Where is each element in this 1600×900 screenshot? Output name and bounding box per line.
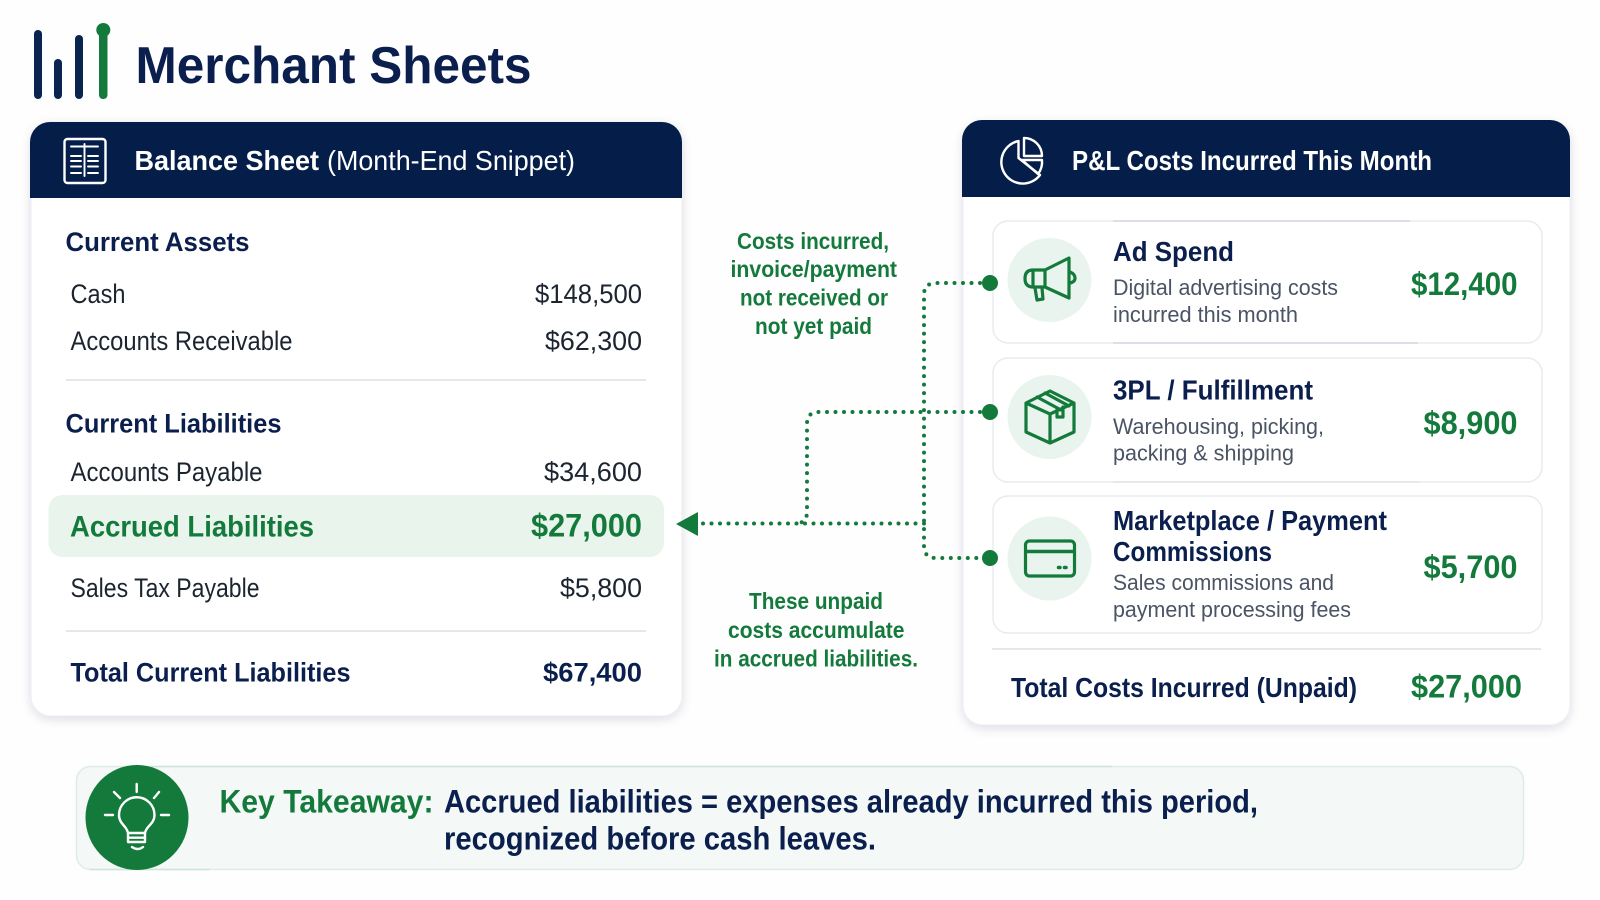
description: ad spend: Digital advertising costs (1113, 275, 1338, 300)
row: sales tax payable: Sales Tax Payable (70, 573, 260, 603)
annotation: unpaid costs accumulate: in accrued liabilities. (714, 646, 918, 672)
description: fulfillment: packing & shipping (1113, 440, 1294, 466)
label: fulfillment: 3PL / Fulfillment (1113, 374, 1313, 406)
cost card: ad spend (993, 221, 1542, 343)
connector node: ad spend (982, 275, 998, 291)
cost card: marketplace commissions (993, 496, 1542, 633)
amount: marketplace commissions: $5,700 (1424, 549, 1518, 585)
description: fulfillment: Warehousing, picking, (1113, 414, 1324, 439)
connector node: fulfillment (982, 404, 998, 420)
row: accounts payable: $34,600 (544, 457, 642, 487)
amount: ad spend: $12,400 (1411, 266, 1518, 302)
label: marketplace commissions: Marketplace / Payment (1113, 505, 1387, 536)
icon: megaphone (1025, 258, 1075, 300)
balance sheet heading: (Month-End Snippet) (327, 145, 575, 176)
annotation: costs incurred: not yet paid (755, 313, 872, 339)
takeaway text: Accrued liabilities = expenses already incurred this period, (444, 784, 1258, 820)
row: total current liabilities: Total Current Liabilities (70, 658, 350, 688)
section heading: current assets: Current Assets (66, 227, 250, 257)
annotation: unpaid costs accumulate: These unpaid (749, 588, 883, 614)
icon: pie chart (1001, 138, 1042, 184)
row: cash: Cash (70, 279, 126, 309)
label: marketplace commissions: Commissions (1113, 536, 1272, 567)
label: ad spend: Ad Spend (1113, 236, 1234, 267)
icon: box (1026, 391, 1074, 443)
annotation: costs incurred: Costs incurred, (737, 228, 889, 254)
row: total current liabilities (70, 658, 642, 688)
row: accounts receivable: Accounts Receivable (70, 326, 292, 356)
annotation: unpaid costs accumulate (714, 588, 918, 672)
row: accounts receivable: $62,300 (545, 326, 642, 356)
label: marketplace commissions (1113, 505, 1387, 567)
takeaway label: Key Takeaway: (220, 784, 434, 820)
P&L header bar (962, 120, 1570, 197)
balance sheet header bar (30, 122, 682, 198)
connector node: commissions (982, 550, 998, 566)
row: sales tax payable: $5,800 (560, 573, 642, 603)
total costs row: $27,000 (1411, 668, 1522, 704)
title: Merchant Sheets (136, 37, 532, 95)
row: cash (70, 279, 642, 309)
logo: bar chart mark (34, 23, 110, 99)
cost card: fulfillment (993, 358, 1542, 482)
row: cash: $148,500 (535, 279, 642, 309)
annotation: costs incurred: not received or (740, 284, 888, 310)
row: accrued liabilities highlight: $27,000 (531, 508, 642, 544)
arrowhead (676, 512, 698, 536)
panel: P&L costs (962, 120, 1570, 725)
description: marketplace commissions: Sales commissions and (1113, 570, 1334, 595)
row: sales tax payable (70, 573, 642, 603)
amount: fulfillment: $8,900 (1424, 405, 1518, 441)
connector arrows: costs to accrued liabilities (676, 275, 998, 566)
total costs row (1011, 668, 1522, 704)
description: marketplace commissions (1113, 570, 1351, 622)
row: accrued liabilities highlight (48, 495, 664, 557)
annotation: costs incurred: invoice/payment (730, 256, 897, 282)
total costs row: Total Costs Incurred (Unpaid) (1011, 672, 1357, 703)
section heading: current liabilities: Current Liabilities (66, 408, 282, 438)
row: accounts payable (70, 457, 642, 487)
description: marketplace commissions: payment processing fees (1113, 597, 1351, 622)
row: accounts receivable (70, 326, 642, 356)
icon: light bulb (86, 765, 188, 870)
icon: payment card (1026, 541, 1074, 576)
row: accounts payable: Accounts Payable (70, 457, 262, 487)
description: ad spend: incurred this month (1113, 302, 1298, 327)
icon: ledger sheet (64, 139, 106, 183)
takeaway text (444, 784, 1258, 856)
row: accrued liabilities highlight: Accrued Liabilities (70, 510, 314, 544)
P&L heading: P&L Costs Incurred This Month (1072, 145, 1432, 176)
row: total current liabilities: $67,400 (543, 658, 642, 688)
description: ad spend (1113, 275, 1338, 327)
annotation: costs incurred (730, 228, 897, 339)
description: fulfillment (1113, 414, 1324, 466)
takeaway text: recognized before cash leaves. (444, 820, 876, 856)
panel: balance sheet (30, 122, 682, 716)
callout: key takeaway (76, 765, 1524, 870)
annotation: unpaid costs accumulate: costs accumulate (728, 617, 904, 643)
balance sheet heading: Balance Sheet (134, 145, 319, 176)
